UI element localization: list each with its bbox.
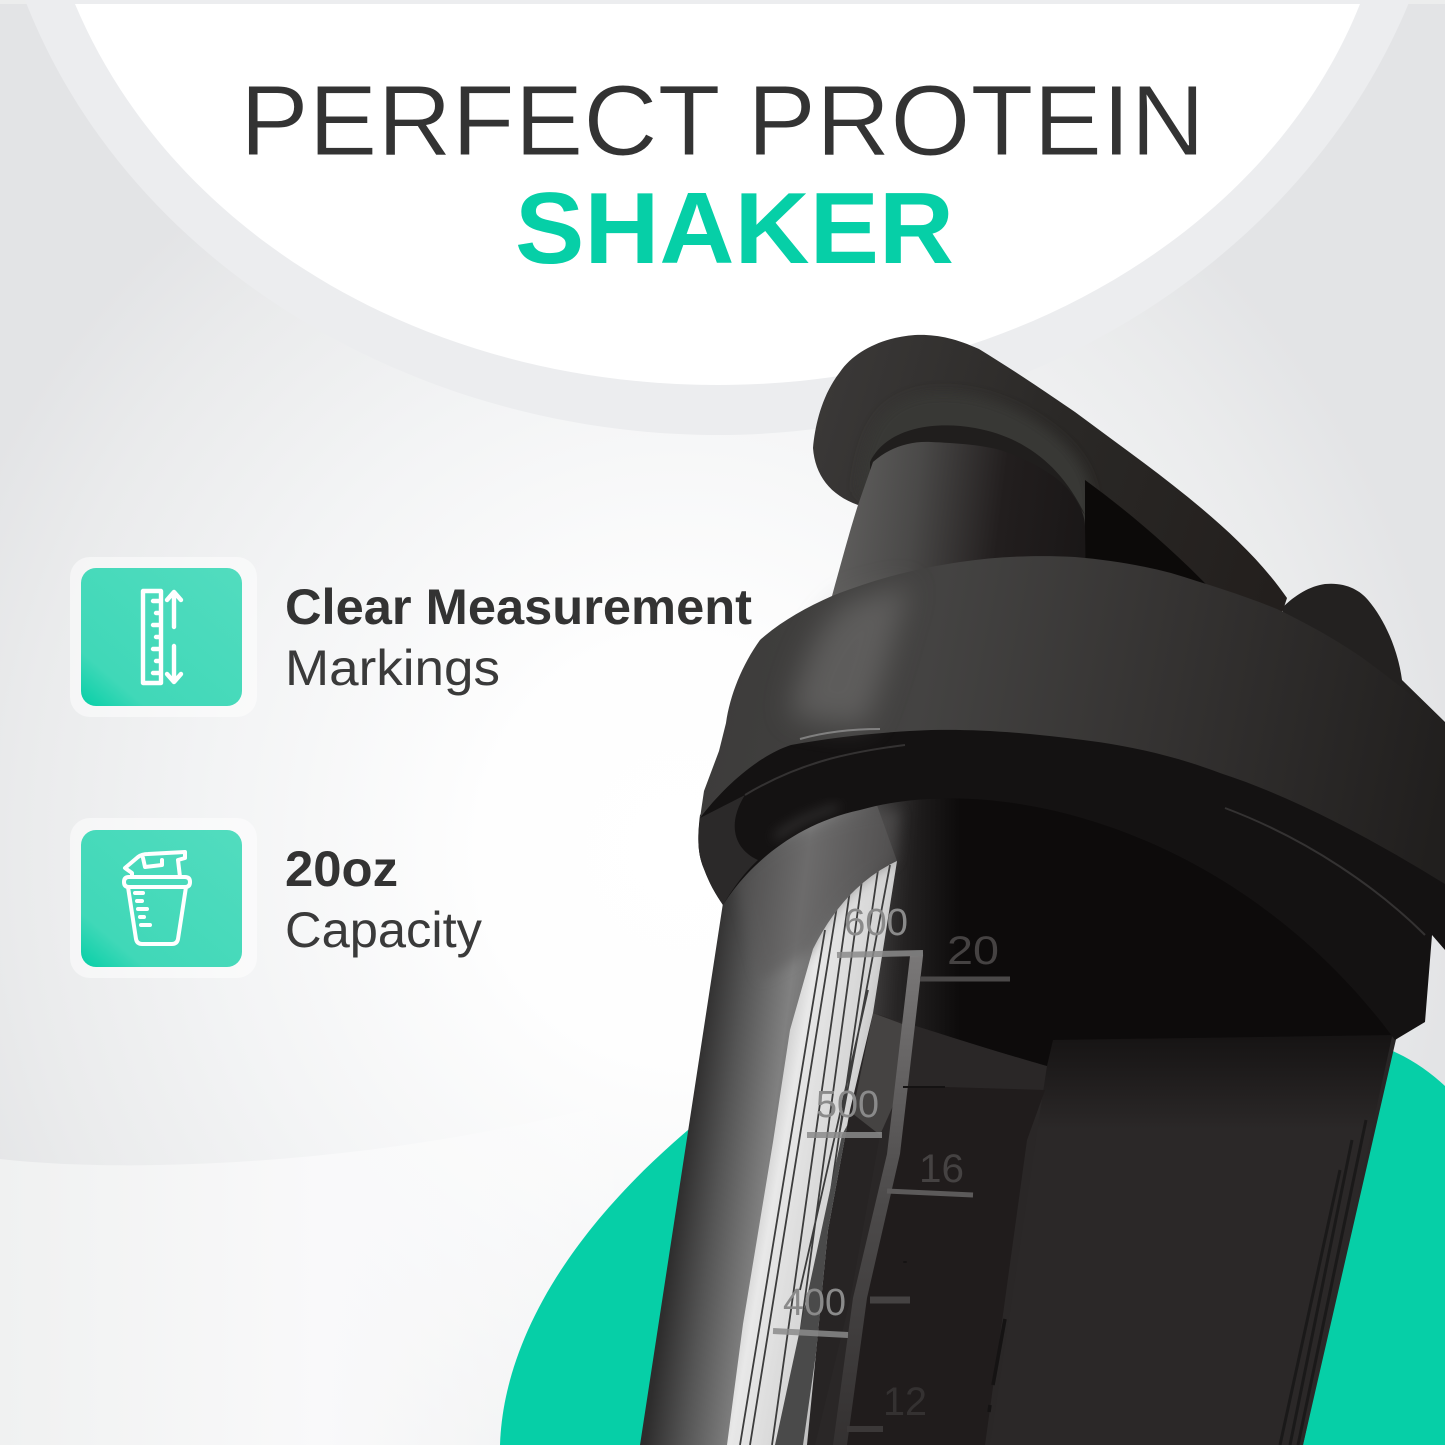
label 600: 600	[844, 902, 908, 944]
lid dome	[700, 556, 1445, 884]
interior dark inset	[835, 1087, 1045, 1445]
feature: measurement	[70, 557, 752, 717]
side tab	[1282, 584, 1445, 820]
lid texture highlight	[790, 585, 910, 725]
tile frame	[70, 818, 257, 978]
feature heading: Clear Measurement	[285, 579, 752, 635]
title line 1: PERFECT PROTEIN	[240, 65, 1205, 177]
top strip	[0, 0, 1445, 4]
feature: capacity	[70, 818, 482, 978]
icon: ruler with arrows	[143, 591, 181, 683]
lid gloss	[800, 729, 880, 739]
green blob	[500, 1050, 1445, 1445]
right side panel	[990, 1000, 1400, 1445]
lower background band	[0, 1095, 640, 1445]
tile frame	[70, 557, 257, 717]
cap dark ring	[870, 425, 1085, 515]
header white arc	[75, 4, 1360, 385]
millilitre labels	[783, 902, 908, 1324]
scale column	[833, 956, 923, 1445]
window highlight	[727, 861, 897, 1445]
title line 2: SHAKER	[515, 173, 954, 285]
tile	[81, 568, 242, 706]
feature heading: 20oz	[285, 841, 398, 897]
label 16: 16	[919, 1147, 964, 1191]
body gloss	[775, 807, 838, 838]
label 400: 400	[783, 1282, 846, 1324]
upper dark shade	[850, 720, 1430, 1066]
reflected dark wedge	[762, 1110, 880, 1445]
bottle body	[640, 720, 1430, 1445]
ounce labels	[883, 929, 999, 1424]
cap dark underside	[1085, 480, 1235, 615]
measurement window	[727, 861, 897, 1445]
lower lid skirt	[698, 700, 1445, 1040]
header outer arc	[25, 0, 1410, 435]
interior behind scale	[760, 1013, 1047, 1445]
icon: shaker cup	[124, 852, 190, 944]
spout	[825, 442, 1086, 610]
dark gap beside window	[848, 1013, 913, 1135]
scratch marks	[905, 1261, 1005, 1412]
reflected stripes	[740, 865, 890, 1445]
label 500: 500	[816, 1084, 879, 1126]
neck highlight	[735, 810, 900, 980]
label 20: 20	[947, 929, 999, 973]
reflected shape	[775, 1120, 850, 1445]
tile	[81, 830, 242, 967]
skirt gloss lines	[745, 745, 1425, 935]
shaker bottle	[640, 335, 1445, 1445]
label 12: 12	[883, 1380, 927, 1424]
skirt left edge	[698, 795, 758, 905]
cap inner ring	[858, 393, 1092, 600]
title	[240, 65, 1205, 285]
flip cap	[813, 335, 1287, 650]
measurement lines	[773, 953, 923, 1335]
feature subtext: Capacity	[285, 902, 482, 958]
right edge ridges	[1280, 1120, 1366, 1445]
feature subtext: Markings	[285, 640, 500, 696]
ounce lines	[847, 979, 1010, 1429]
